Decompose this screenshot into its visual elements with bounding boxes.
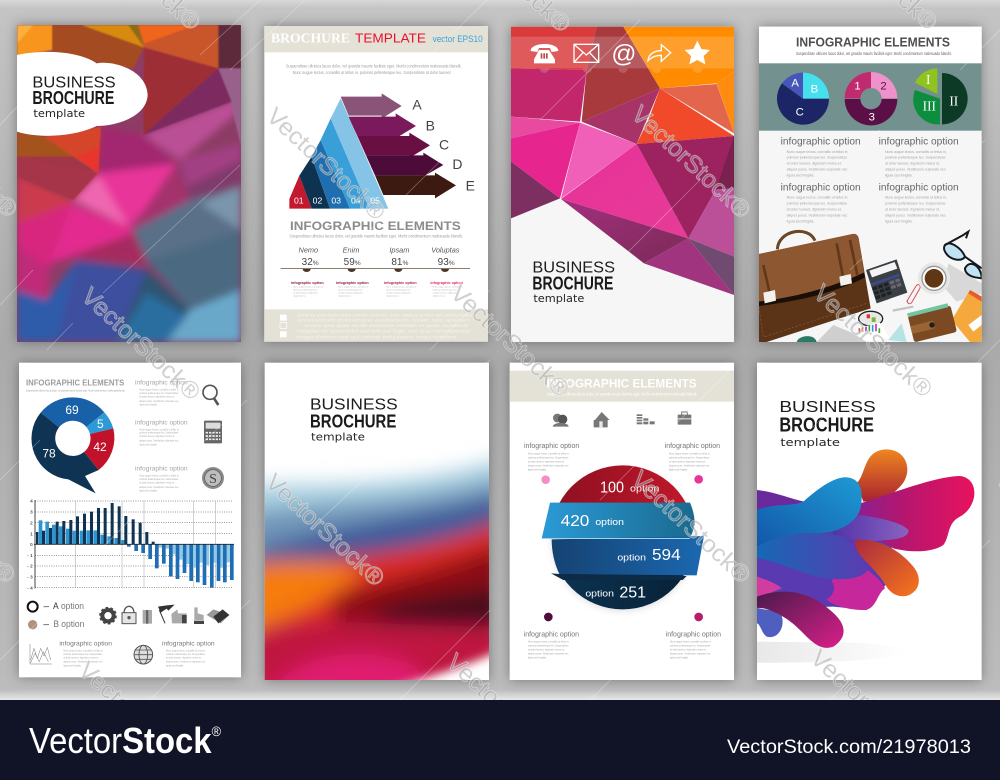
sub heading: Suspendisse ultricies lacus dolor, vel gravida mauris facilisis eget. Morbi condimentum malesuada blandit. [289,233,463,238]
title [532,260,615,305]
option text top left: pulvinar pellentesque leo. Suspendisse [528,456,569,459]
text blocks right of donut: pulvinar pellentesque leo. Suspendisse [139,432,179,435]
option text top left [524,443,579,471]
pie chart: roman numerals [913,68,968,124]
text blocks right of donut: aliquet purus. Vestibulum vulputate nec [139,486,179,489]
bar chart: - 2 [27,564,33,569]
option text bottom left [524,631,579,659]
ribbon circle chart: 420 [561,513,589,530]
arrows A to E: B [426,117,435,133]
ribbon circle chart [542,463,704,613]
pyramid: 02 [313,195,322,205]
footer logo: VectorStock [29,720,220,761]
intro text [286,64,462,75]
option columns [291,280,464,297]
icon: newspaper [943,263,982,302]
icon: envelope [574,44,599,62]
title: BROCHURE [532,272,613,293]
mini line chart icon [30,644,52,664]
bottom option text left: ligula sed fringilla. [63,665,82,668]
text blocks right of donut: Nunc augue lectus, convallis ut tellus in, [139,428,180,431]
text block: option 2: infographic option [879,137,959,148]
option text bottom left: infographic option [524,631,579,638]
header band: Suspendisse ultricies lacus dolor, vel gravida mauris facilisis eget. Morbi condimentum malesuada blandit. [547,391,697,396]
bar chart: 3 [30,510,33,515]
option text top left: at dolor laoreet, dignissim metus et, [528,460,565,463]
watermarks: VectorStock® [76,283,206,406]
ribbon circle chart: option [595,517,624,527]
text blocks right of donut: pulvinar pellentesque leo. Suspendisse [139,478,179,481]
icon: desk papers [797,323,907,342]
panel: ribbon circle brochure [510,363,734,680]
ribbon circle chart: option [585,589,614,599]
watermarks: VectorStock® [261,103,391,226]
text block: option 2: aliquet purus. Vestibulum vulputate nec [885,168,946,172]
option columns: aliquet purus. [386,294,400,297]
donut chart: 1 2 3: 2 [880,80,887,92]
icon: calculator [866,259,907,303]
heading: INFOGRAPHIC ELEMENTS [26,379,125,388]
heading: INFOGRAPHIC ELEMENTS [796,36,950,50]
icon: curved arrow [648,45,671,61]
speech bubble donut chart [31,397,114,493]
watermarks: VectorStock® [260,469,390,592]
option text top left: infographic option [524,443,579,450]
title [779,399,876,449]
marker dots [541,475,703,621]
option text bottom left: pulvinar pellentesque leo. Suspendisse [528,644,569,647]
text block: option 3: at dolor laoreet, dignissim metus et, [787,207,842,211]
option text bottom right [666,631,721,659]
heading [26,379,126,392]
option columns: pulvinar pellentesque leo. [386,288,411,291]
option columns: aliquet purus. [293,294,307,297]
bar chart: 2 [30,520,33,525]
option columns: infographic option [430,280,464,285]
option text bottom right: Nunc augue lectus, convallis ut tellus in, [670,640,712,643]
option columns: pulvinar pellentesque leo. [338,288,363,291]
bottom option text right: at dolor laoreet, dignissim metus et, [166,657,202,660]
pie chart: roman numerals: III [923,99,936,114]
header band: vector EPS10 [433,34,483,44]
option text top left: Nunc augue lectus, convallis ut tellus in, [528,452,570,455]
pyramid: 05 [370,195,380,205]
text block: option 2: Nunc augue lectus, convallis ut tellus in, [885,150,947,154]
statistics row: Nemo [299,246,318,255]
title [32,74,116,120]
header band [264,26,488,52]
text blocks right of donut: ligula sed fringilla. [139,490,158,493]
footer bar [0,700,1000,780]
option columns: infographic option [384,280,417,285]
header band: TEMPLATE [355,31,426,46]
text block: option 2: at dolor laoreet, dignissim metus et, [885,162,940,166]
watermarks: VectorStock® [626,466,756,589]
text block: option 3 [781,182,861,223]
arrows A to E [341,93,475,198]
header band: BROCHURE [271,30,350,45]
donut chart: 1 2 3: 3 [869,111,875,123]
option text bottom left: at dolor laoreet, dignissim metus et, [528,648,565,651]
text blocks right of donut [135,380,188,493]
bottom option text right: pulvinar pellentesque leo. Suspendisse [166,653,206,656]
icon: folder [952,290,982,342]
watermarks: VectorStock® [73,657,203,780]
title: BROCHURE [310,410,396,431]
heading: infographic elements: INFOGRAPHIC ELEMENTS [290,219,461,233]
icon: globe [134,645,153,664]
option text top left: ligula sed fringilla. [528,468,547,471]
title [310,397,398,444]
watermarks: VectorStock® [626,101,756,224]
intro text: Suspendisse ultricies lacus dolor, vel gravida mauris facilisis eget. Morbi condimentum malesuada blandit. [286,64,462,69]
icons: gear lock card flag thumb hand handshake [100,605,229,624]
option columns: Nunc augue lectus, convallis ut [293,285,323,288]
option text bottom right: pulvinar pellentesque leo. Suspendisse [670,644,711,647]
text block: option 4: at dolor laoreet, dignissim metus et, [885,207,940,211]
top row right pages [511,27,982,342]
statistics row: 93% [438,257,455,268]
text blocks right of donut: pulvinar pellentesque leo. Suspendisse [139,392,179,395]
bar chart: - 3 [27,574,33,579]
icon: bar blocks [637,414,655,424]
panel: faceted brochure with icons [511,27,734,342]
option text bottom right: infographic option [666,631,721,638]
option columns: Nunc augue lectus, convallis ut [386,285,416,288]
text blocks right of donut: infographic option [135,419,188,426]
option text top right: ligula sed fringilla. [669,468,688,471]
text block: option 2 [879,137,959,178]
ribbon circle chart: option [630,484,659,494]
bottom option text right: Nunc augue lectus, convallis ut tellus in, [166,650,206,653]
title: template [311,431,365,444]
pie band [759,63,982,131]
option columns: at dolor laoreet, dignissim [293,291,318,294]
option text top right: at dolor laoreet, dignissim metus et, [669,460,706,463]
heading [759,27,982,63]
top row left pages [17,25,488,342]
bottom option text left [59,641,112,668]
pyramid: 01 [294,195,304,205]
watermarks: VectorStock® [445,280,575,403]
option columns: Nunc augue lectus, convallis ut [433,285,463,288]
option text top right: aliquet purus. Vestibulum vulputate nec [669,464,710,467]
footer logo: ® [212,723,222,739]
option text top left: aliquet purus. Vestibulum vulputate nec [528,464,569,467]
pyramid: 04 [351,195,361,205]
text block: option 3: aliquet purus. Vestibulum vulputate nec [787,213,848,217]
text blocks right of donut: aliquet purus. Vestibulum vulputate nec [139,400,179,403]
bar chart: 0 [30,542,33,547]
option text bottom left: ligula sed fringilla. [528,656,547,659]
title: template [780,436,840,449]
panel: blurred gradient brochure [264,362,489,680]
bottom option text left: infographic option [59,641,112,648]
icon: coffee cup [918,262,950,294]
bar chart: 1 [30,531,33,536]
desk illustration [758,231,982,342]
bar chart [27,499,234,590]
option columns: pulvinar pellentesque leo. [293,288,318,291]
text blocks right of donut: aliquet purus. Vestibulum vulputate nec [139,440,179,443]
text block: option 1: pulvinar pellentesque leo. Suspendisse [787,156,847,160]
speech bubble donut chart: 42 [93,440,107,454]
bottom fade [396,646,489,680]
title: BUSINESS [32,74,116,91]
pie chart: A B C: B [811,84,818,96]
footer url: VectorStock.com/21978013 [727,737,971,758]
header band: INFOGRAPHIC ELEMENTS [547,376,697,390]
text blocks right of donut: at dolor laoreet, dignissim metus et, [139,435,175,438]
statistics row: Voluptas [431,246,460,255]
blurred colour waves [264,450,489,680]
bottom option text left: at dolor laoreet, dignissim metus et, [63,657,99,660]
option text bottom right: aliquet purus. Vestibulum vulputate nec [670,652,711,655]
bottom option text left: aliquet purus. Vestibulum vulputate nec [63,661,103,664]
bottom option text right: aliquet purus. Vestibulum vulputate nec [166,661,206,664]
option columns: pulvinar pellentesque leo. [433,288,458,291]
icon: users [553,414,569,427]
option columns: at dolor laoreet, dignissim [338,291,363,294]
arrows A to E: A [412,97,422,113]
option text bottom left: Nunc augue lectus, convallis ut tellus in, [528,640,570,643]
legend and icons row: B option [53,619,84,629]
text block: option 4 [879,182,959,223]
option columns: infographic option [336,280,369,285]
text blocks right of donut: Nunc augue lectus, convallis ut tellus in, [139,389,180,392]
text block: option 4: Nunc augue lectus, convallis ut tellus in, [885,196,947,200]
title: BROCHURE [779,413,874,436]
icon: magnifier [203,385,218,405]
header band [510,371,734,402]
text block: option 4: ligula sed fringilla. [885,219,913,223]
text block: option 3: ligula sed fringilla. [787,219,814,223]
option text bottom left: aliquet purus. Vestibulum vulputate nec [528,652,569,655]
title: BUSINESS [310,397,398,414]
bar chart: - 1 [27,553,33,558]
icon: calculator [204,421,222,443]
icon: glasses [944,232,982,278]
footer band: eaque ipsa quae ab illo inventore veritatis et quasi architecto [305,323,469,328]
text block: option 1: infographic option [781,137,861,148]
icon: telephone [531,44,558,63]
footer band: voluptas sit aspernatur aut odit aut fugit, sed quia consequuntur [297,329,471,334]
title: template [33,107,85,120]
bottom option text right: ligula sed fringilla. [166,665,184,668]
panel: donut and bar chart brochure [19,363,241,677]
footer band [264,309,488,342]
icon: wallet [907,303,957,342]
pyramid: 03 [331,195,341,205]
text blocks right of donut: ligula sed fringilla. [139,443,158,446]
pie chart: roman numerals: II [949,93,958,108]
legend and icons row: A option [53,601,84,611]
option text bottom right: ligula sed fringilla. [670,656,689,659]
option columns: at dolor laoreet, dignissim [433,291,457,294]
watermarks: VectorStock® [441,649,571,772]
pie chart: A B C: A [791,78,799,90]
icon: star [685,41,710,64]
bottom option text left: pulvinar pellentesque leo. Suspendisse [63,653,103,656]
ribbon circle chart: 100 [600,480,624,497]
speech bubble donut chart: 69 [65,403,79,417]
ribbon circle chart: 251 [619,584,646,601]
arrows A to E: D [452,156,462,172]
icon: case [678,412,691,425]
title: template [533,292,585,305]
footer band: Sed ut perspiciatis unde omnis iste natus error sit voluptatem [297,312,477,317]
heading: Suspendisse ultricies lacus dolor, vel gravida mauris facilisis eget. Morbi condimentum malesuada blandit. [26,388,126,392]
bottom option text left: Nunc augue lectus, convallis ut tellus in, [63,650,104,653]
icon: paperclip [907,285,920,304]
text block: option 1: ligula sed fringilla. [787,174,814,178]
fluid splash artwork [757,449,974,663]
bottom option text right: infographic option [162,641,215,648]
bottom option text right [162,641,215,668]
option text bottom right: at dolor laoreet, dignissim metus et, [670,648,707,651]
title: BUSINESS [779,399,876,416]
text blocks right of donut: infographic option [135,380,188,387]
icon: at sign: @ [611,41,636,68]
arrows A to E: C [439,137,449,153]
text block: option 3: pulvinar pellentesque leo. Suspendisse [787,201,847,205]
intro text: Nunc augue lectus, convallis ut tellus in, pulvinar pellentesque leo. Suspendisse at dolor laoreet [293,70,451,75]
polygon mosaic background [17,25,241,342]
statistics row: Ipsam [389,246,409,255]
footer band: magni dolores eos qui ratione voluptatem sequi nesciunt [297,334,458,339]
text block: option 1: aliquet purus. Vestibulum vulputate nec [787,168,848,172]
option text top right [665,443,720,471]
text block: option 4: pulvinar pellentesque leo. Suspendisse [885,201,945,205]
icon: dollar coin: S [209,472,217,487]
donut chart: 1 2 3: 1 [854,80,861,92]
icon: house [594,412,610,427]
bar chart: - 4 [27,585,33,590]
statistics row: 81% [391,257,408,268]
text blocks right of donut: ligula sed fringilla. [139,404,158,407]
bottom row left pages [19,362,489,680]
option text top right: infographic option [665,443,720,450]
pie chart: A B C [777,73,829,125]
watermarks: VectorStock® [808,280,938,403]
panel: pie charts and desk items [758,27,982,342]
translucent icon band [511,37,734,73]
panel: pyramid infographic brochure [264,26,488,342]
title: BROCHURE [32,87,114,108]
white cloud title shape [17,52,148,136]
pie chart: roman numerals: I [926,72,930,87]
panel: polygon brochure cover [17,25,241,342]
pie chart: A B C: C [796,106,804,118]
legend and icons row [28,601,84,629]
text block: option 2: pulvinar pellentesque leo. Suspendisse [885,156,945,160]
footer band: accusantium doloremque laudantium, totam rem aperiam [297,318,470,323]
option columns: at dolor laoreet, dignissim [386,291,411,294]
text blocks right of donut: at dolor laoreet, dignissim metus et, [139,481,175,484]
text blocks right of donut: infographic option [135,466,188,473]
ribbon circle chart: 594 [652,547,681,564]
arrows A to E: E [466,177,475,193]
polygon artwork [511,27,734,295]
watermarks: VectorStock® [805,645,935,768]
ribbon circle chart: option [617,553,646,563]
bottom row right pages [510,363,982,680]
option columns: aliquet purus. [338,294,352,297]
icon: dollar coin [202,467,224,489]
icon: key [893,307,913,311]
text block: option 1: Nunc augue lectus, convallis ut tellus in, [787,150,848,154]
panel: fluid shapes brochure [757,363,982,680]
speech bubble donut chart: 5 [97,417,104,431]
option columns: Nunc augue lectus, convallis ut [338,285,368,288]
icon: colour chart [856,311,890,342]
text block: option 3: Nunc augue lectus, convallis ut tellus in, [787,196,848,200]
text block: option 1: at dolor laoreet, dignissim metus et, [787,162,842,166]
text block: option 3: infographic option [781,182,861,193]
title: BUSINESS [532,260,615,277]
donut chart: 1 2 3 [845,72,897,125]
icon: briefcase [758,231,871,342]
text block: option 4: infographic option [879,182,959,193]
option text top right: Nunc augue lectus, convallis ut tellus in, [669,452,711,455]
bar chart: 4 [30,499,33,504]
statistics row: 32% [302,257,319,268]
text block: option 2: ligula sed fringilla. [885,174,913,178]
statistics row: 59% [344,257,361,268]
option columns: infographic option [291,280,324,285]
option columns: aliquet purus. [433,294,446,297]
speech bubble donut chart: 78 [42,447,56,461]
pyramid [289,98,388,209]
text blocks right of donut: at dolor laoreet, dignissim metus et, [139,395,175,398]
statistics row: Enim [343,246,359,255]
option text top right: pulvinar pellentesque leo. Suspendisse [669,456,710,459]
text block: option 4: aliquet purus. Vestibulum vulputate nec [885,213,946,217]
text blocks right of donut: Nunc augue lectus, convallis ut tellus in, [139,475,180,478]
text block: option 1 [781,137,861,178]
statistics row [281,246,470,272]
